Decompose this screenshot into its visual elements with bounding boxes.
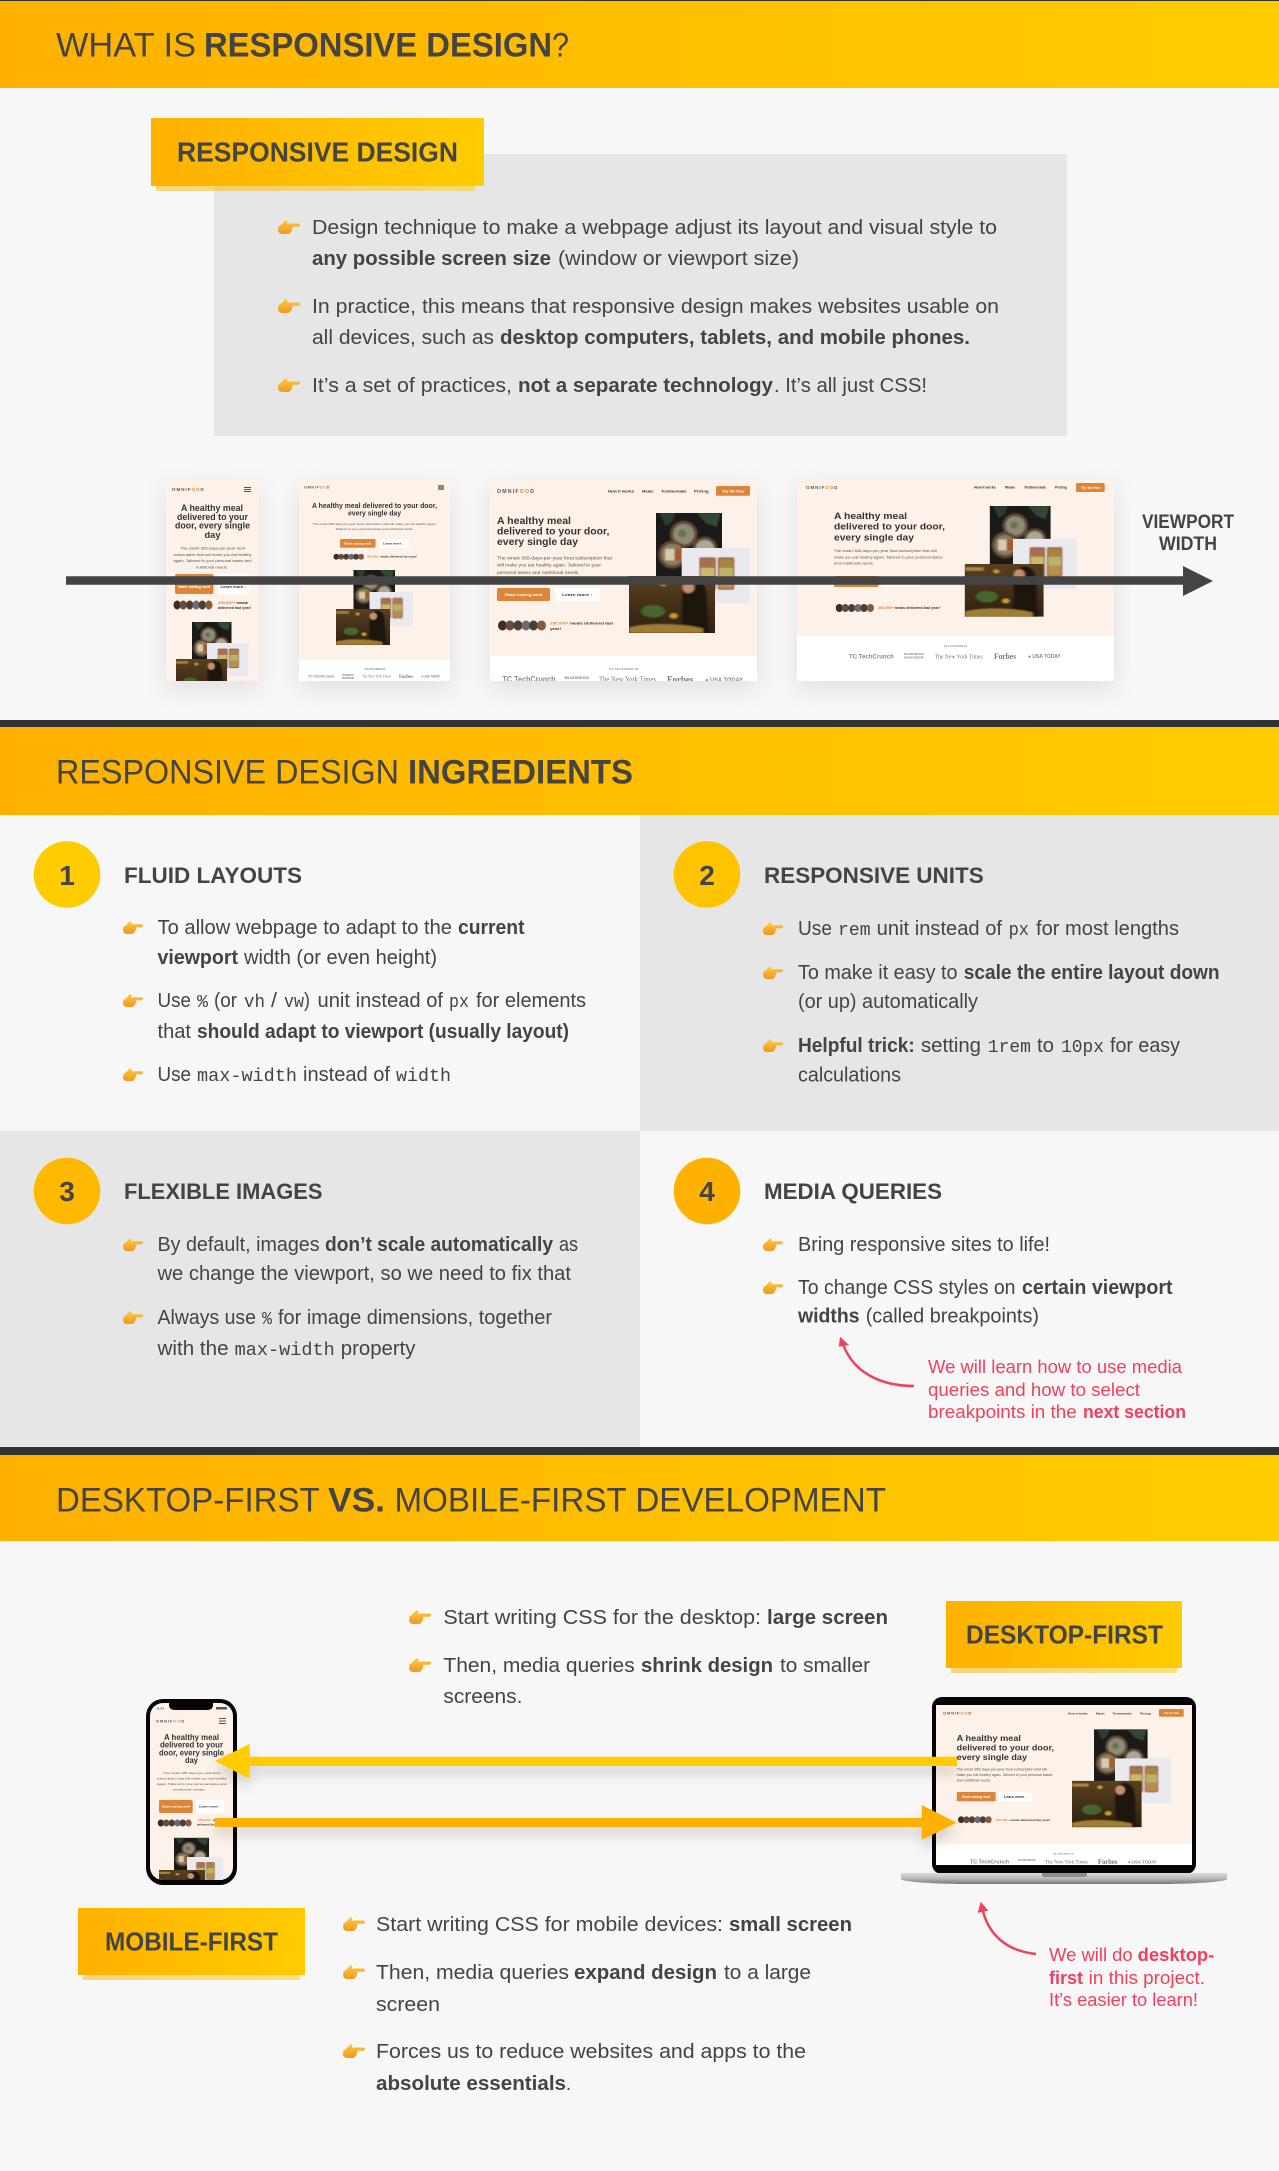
- device: laptop: Forbes: [1098, 1859, 1118, 1866]
- screen: tablet width: delivered to your door,: [497, 525, 609, 537]
- device: laptop: 250,000+ meals delivered last year!: [996, 1818, 1050, 1822]
- device: phone: Learn more ↓: [199, 1805, 222, 1809]
- heading banner: desktop-first vs mobile-first: MOBILE-FIRST DEVELOPMENT: [394, 1482, 886, 1520]
- heading banner: desktop-first vs mobile-first: VS.: [328, 1482, 385, 1520]
- device: phone: 9:41: [157, 1706, 164, 1710]
- badge: responsive design: RESPONSIVE DESIGN: [177, 136, 458, 168]
- screen: small tablet width: Start eating well: [344, 542, 371, 546]
- arrow: desktop-first shrink to mobile: [215, 1744, 957, 1779]
- screen: desktop width: A healthy meal: [834, 511, 907, 522]
- arrow: red curved to laptop: [978, 1902, 1036, 1954]
- bullet: helpful trick: setting: [921, 1035, 981, 1057]
- screen: phone width: delivered last year!: [218, 606, 251, 610]
- bullet: change css styles: certain viewport: [1022, 1277, 1173, 1299]
- device: laptop: The smart 365-days-per-year food subscription that will: [957, 1768, 1047, 1772]
- bullet: absolute essentials: Forces us to reduce websites and apps to the: [376, 2041, 806, 2063]
- bullet: change css styles: To change CSS styles on: [798, 1277, 1016, 1299]
- bullet: start with desktop: large screen: [767, 1607, 888, 1629]
- screen: small tablet width: OMNIFOOD: [304, 486, 330, 490]
- bullet: change css styles: [763, 1277, 1173, 1328]
- screen: phone width: 250,000+ meals: [218, 601, 248, 605]
- panel: definition bullets: [151, 118, 1067, 436]
- screen: desktop width: OMNIFOOD: [806, 485, 838, 490]
- bullet: set of practices: [278, 375, 927, 397]
- label: viewport width: VIEWPORT: [1142, 512, 1234, 533]
- screen: desktop width: Try for free: [1081, 486, 1100, 490]
- screen: tablet width: TC TechCrunch: [502, 675, 556, 684]
- callout: desktop-first in this project: desktop-: [1138, 1945, 1214, 1965]
- bullet: percent for images: property: [341, 1338, 415, 1360]
- bullet: percent units: ): [304, 990, 310, 1012]
- bullet: adapt to viewport: viewport: [158, 947, 238, 969]
- bullet: shrink design: shrink design: [641, 1655, 773, 1677]
- device: phone: day: [185, 1756, 199, 1765]
- screen: small tablet width: Forbes: [399, 675, 413, 680]
- bullet: in practice: all devices, such as: [312, 327, 494, 349]
- screen: tablet width: year!: [550, 626, 561, 631]
- screen: tablet width: Learn more ↓: [562, 592, 593, 597]
- device: phone: Start eating well: [162, 1805, 190, 1809]
- bullet: rem unit: px: [1009, 920, 1029, 941]
- screen: tablet width: Start eating well: [504, 592, 542, 597]
- bullet: max-width: width: [396, 1066, 451, 1087]
- screen: phone width: delivered to your: [177, 512, 248, 523]
- heading banner: what is responsive design: [0, 0, 1279, 88]
- screen: tablet width: [490, 480, 757, 684]
- bullet: max-width: max-width: [197, 1066, 297, 1087]
- screen: tablet width: How it works: [608, 488, 635, 494]
- bullet: rem unit: [763, 918, 1179, 941]
- screen: desktop width: make you eat healthy again. Tailored to your personal tastes: [834, 556, 943, 560]
- label: viewport width: WIDTH: [1159, 534, 1217, 555]
- screen: small tablet width: ● USA TODAY: [421, 674, 441, 678]
- arrow: viewport width: [66, 566, 1213, 596]
- device: laptop: [901, 1697, 1227, 1884]
- callout: desktop-first in this project: It’s easier to learn!: [1049, 1990, 1198, 2010]
- bullet: absolute essentials: absolute essentials: [376, 2073, 566, 2095]
- bullet: adapt to viewport: width (or even height): [243, 947, 437, 969]
- bullet: percent units: [123, 990, 586, 1043]
- bullet: rem unit: Use: [798, 918, 832, 940]
- device: laptop: Testimonials: [1113, 1711, 1132, 1715]
- device: laptop: ● USA TODAY: [1128, 1860, 1157, 1864]
- bullet: scale layout: scale the entire layout down: [964, 962, 1220, 984]
- heading banner: ingredients: INGREDIENTS: [408, 754, 633, 792]
- device: phone: A healthy meal: [164, 1733, 219, 1742]
- label: viewport width: [1142, 512, 1234, 555]
- screen: small tablet width: A healthy meal delivered to your door,: [312, 503, 437, 510]
- callout: desktop-first in this project: [1049, 1945, 1214, 2010]
- device: laptop: Try for free: [1164, 1711, 1179, 1715]
- bullet: helpful trick: for easy: [1110, 1035, 1180, 1057]
- bullet: start with mobile: small screen: [729, 1914, 852, 1936]
- screen: phone width: OMNIFOOD: [172, 487, 205, 492]
- bullet: percent for images: for image dimensions, together: [278, 1307, 552, 1329]
- device: laptop: A healthy meal: [957, 1733, 1021, 1743]
- arrow: mobile-first expand to desktop: [215, 1805, 957, 1840]
- device: laptop: BUSINESS: [1018, 1858, 1036, 1862]
- screen: tablet width: will make you eat healthy again. Tailored to your: [497, 562, 602, 568]
- screen: tablet width: A healthy meal: [497, 515, 571, 527]
- bullet: adapt to viewport: [123, 917, 525, 969]
- bullet: helpful trick: 10px: [1061, 1037, 1104, 1058]
- device: laptop: Meals: [1096, 1711, 1105, 1715]
- device: phone: subscription that will make you eat healthy: [157, 1776, 227, 1780]
- panel: media queries: [640, 1131, 1279, 1447]
- screen: tablet width: 250,000+ meals delivered last: [550, 620, 614, 626]
- screen: phone width: Learn more ↓: [220, 585, 247, 589]
- bullet: helpful trick: calculations: [798, 1064, 901, 1086]
- badge: desktop-first: DESKTOP-FIRST: [966, 1620, 1163, 1650]
- screen: small tablet width: [299, 480, 450, 681]
- device: phone: The smart 365-days-per-year food: [163, 1771, 221, 1775]
- bullet: percent units: that: [158, 1021, 191, 1043]
- screen: tablet width: personal tastes and nutritional needs.: [497, 570, 580, 575]
- screen: small tablet width: Learn more ↓: [383, 542, 405, 546]
- heading: fluid layouts: FLUID LAYOUTS: [124, 863, 302, 888]
- screen: desktop width: Pricing: [1055, 486, 1067, 490]
- device: laptop: OMNIFOOD: [943, 1710, 972, 1716]
- screen: desktop width: Forbes: [994, 652, 1016, 661]
- number badge 3: [34, 1158, 100, 1224]
- device: laptop: Pricing: [1140, 1711, 1151, 1715]
- screen: desktop width: Meals: [1005, 486, 1015, 490]
- screen: tablet width: The smart 365-days-per-year food subscription that: [497, 556, 613, 560]
- screen: desktop width: TC TechCrunch: [849, 654, 894, 660]
- callout: desktop-first in this project: We will do: [1049, 1945, 1133, 1965]
- screen: small tablet width: Tailored to your personal tastes and nutritional needs.: [336, 527, 414, 531]
- bullet: start with mobile: [343, 1914, 852, 1936]
- number badge 2: [674, 841, 740, 908]
- device: phone: 250,000+ meals: [198, 1818, 222, 1822]
- screen: desktop width: ● USA TODAY: [1028, 654, 1061, 660]
- bullet: max-width: Use: [158, 1064, 191, 1086]
- bullet: rem unit: unit instead of: [877, 918, 1002, 940]
- screen: desktop width: Testimonials: [1024, 486, 1046, 490]
- screen: phone width: subscription that will make you eat healthy: [174, 553, 252, 557]
- screen: desktop width: INSIDER: [904, 656, 924, 660]
- screen: phone width: A healthy meal: [181, 503, 243, 514]
- panel: flexible images: [0, 1131, 640, 1447]
- bullet: set of practices: . It’s all just CSS!: [774, 375, 927, 397]
- number badge 2: 2: [699, 860, 715, 891]
- screen: tablet width: Meals: [642, 488, 654, 494]
- bullet: images don't scale: [123, 1234, 578, 1285]
- arrow: red curved to breakpoints: [839, 1337, 914, 1386]
- bullet: percent units: should adapt to viewport (usually layout): [197, 1021, 569, 1043]
- screen: small tablet width: The New York Times: [362, 674, 391, 678]
- bullet: helpful trick: [763, 1035, 1180, 1086]
- device: laptop: The New York Times: [1045, 1860, 1088, 1866]
- bullet: expand design: Then, media queries: [376, 1962, 569, 1984]
- bullet: bring to life: Bring responsive sites to life!: [798, 1234, 1050, 1256]
- bullet: expand design: [343, 1962, 811, 2016]
- bullet: percent units: Use: [158, 990, 191, 1012]
- screen: desktop width: AS FEATURED IN: [944, 645, 967, 648]
- bullet: helpful trick: Helpful trick:: [798, 1035, 915, 1057]
- bullet: expand design: expand design: [574, 1962, 717, 1984]
- bullet: set of practices: not a separate technology: [518, 375, 774, 397]
- callout: desktop-first in this project: first: [1049, 1968, 1083, 1988]
- bullet: start with mobile: Start writing CSS for mobile devices:: [376, 1914, 723, 1936]
- bullet: shrink design: Then, media queries: [443, 1655, 635, 1677]
- heading: flexible images: FLEXIBLE IMAGES: [124, 1179, 322, 1204]
- screen: tablet width: Try for free: [722, 489, 744, 493]
- screen: tablet width: The New York Times: [599, 675, 656, 684]
- screen: desktop width: How it works: [974, 486, 996, 490]
- bullet: shrink design: screens.: [443, 1686, 522, 1708]
- bullet: start with desktop: Start writing CSS for the desktop:: [443, 1607, 761, 1629]
- badge: mobile-first: [78, 1908, 305, 1980]
- bullet: expand design: screen: [376, 1994, 440, 2016]
- section: desktop-first vs mobile-first: [0, 1447, 1279, 2095]
- screen: small tablet width: 250,000+ meals delivered last year!: [367, 555, 417, 559]
- number badge 1: [34, 841, 100, 908]
- badge: responsive design: [151, 118, 484, 191]
- bullet: percent for images: Always use: [158, 1307, 256, 1329]
- panel: fluid layouts: [0, 815, 640, 1131]
- screen: phone width: door, every single: [175, 520, 250, 532]
- badge: desktop-first: [946, 1601, 1182, 1673]
- screen: phone width: Start eating well: [178, 585, 210, 589]
- callout: next section note: breakpoints in the: [928, 1402, 1077, 1422]
- screen: desktop width: [797, 479, 1114, 681]
- bullet: percent for images: max-width: [235, 1340, 335, 1361]
- device: phone: delivered to your: [160, 1741, 223, 1750]
- heading banner: desktop-first vs mobile-first: [0, 1447, 1279, 1541]
- screen: tablet width: Forbes: [667, 674, 694, 684]
- heading: responsive units: RESPONSIVE UNITS: [764, 863, 984, 888]
- callout: next section note: We will learn how to use media: [928, 1357, 1183, 1377]
- desktop-first bullets: [409, 1607, 888, 1708]
- device: laptop: Start eating well: [962, 1795, 990, 1799]
- screen: tablet width: AS FEATURED IN: [609, 667, 638, 671]
- mobile-first bullets: [343, 1914, 852, 2095]
- bullet: design technique: (window or viewport size): [558, 248, 799, 270]
- screen: small tablet width: AS FEATURED IN: [364, 668, 385, 671]
- bullet: start with desktop: [409, 1607, 888, 1629]
- screen: tablet width: BUSINESS: [564, 676, 590, 680]
- bullet: shrink design: to smaller: [780, 1655, 870, 1677]
- screen: phone width: The smart 365-days-per-year food: [180, 546, 245, 550]
- bullet: change css styles: widths: [797, 1306, 860, 1328]
- device: phone: OMNIFOOD: [156, 1718, 185, 1724]
- bullet: rem unit: rem: [838, 920, 871, 941]
- heading: media queries: MEDIA QUERIES: [764, 1179, 942, 1204]
- device: phone: [146, 1699, 237, 1900]
- bullet: in practice: In practice, this means that responsive design makes websites usable on: [312, 296, 999, 318]
- bullet: percent for images: with the: [156, 1338, 229, 1360]
- bullet: change css styles: (called breakpoints): [866, 1306, 1039, 1328]
- bullet: percent units: (or: [214, 990, 237, 1012]
- bullet: set of practices: It’s a set of practices,: [312, 375, 512, 397]
- screen: desktop width: 250,000+ meals delivered last year!: [878, 606, 940, 610]
- device: laptop: delivered to your door,: [957, 1742, 1054, 1752]
- bullet: helpful trick: to: [1037, 1035, 1054, 1057]
- bullet: scale layout: (or up) automatically: [798, 991, 978, 1013]
- screen: phone width: again. Tailored to your personal tastes and: [174, 559, 252, 563]
- bullet: max-width: [123, 1064, 451, 1087]
- device: phone: delivered last year!: [197, 1822, 224, 1826]
- bullet: design technique: [278, 217, 997, 270]
- bullet: absolute essentials: .: [566, 2073, 571, 2095]
- screen: phone width: day: [204, 530, 221, 541]
- number badge 1: 1: [59, 860, 75, 891]
- bullet: percent units: /: [271, 990, 277, 1012]
- device: laptop: every single day: [957, 1752, 1027, 1762]
- viewport screens row: [66, 479, 1234, 695]
- screen: phone width: nutritional needs.: [196, 566, 228, 570]
- screen: tablet width: every single day: [497, 536, 578, 548]
- heading banner: desktop-first vs mobile-first: DESKTOP-FIRST: [56, 1482, 320, 1520]
- device: laptop: How it works: [1068, 1711, 1088, 1715]
- screen: small tablet width: INSIDER: [342, 677, 354, 680]
- device: laptop: AS FEATURED IN: [1053, 1852, 1074, 1856]
- bullet: in practice: [278, 296, 999, 349]
- bullet: percent units: for elements: [476, 990, 586, 1012]
- bullet: percent units: px: [449, 992, 469, 1013]
- screen: small tablet width: The smart 365-days-per-year food subscription that will make you eat healthy again.: [313, 522, 437, 526]
- callout: desktop-first in this project: in this project.: [1089, 1968, 1205, 1988]
- number badge 3: 3: [59, 1176, 75, 1207]
- heading banner: what is responsive design: RESPONSIVE DESIGN: [204, 26, 552, 64]
- bullet: percent units: vh: [244, 992, 265, 1013]
- bullet: max-width: instead of: [303, 1064, 390, 1086]
- screen: small tablet width: every single day: [348, 511, 401, 518]
- device: laptop: TC TechCrunch: [970, 1860, 1010, 1866]
- heading banner: ingredients: [0, 720, 1279, 815]
- callout: next section note: queries and how to select: [928, 1380, 1140, 1400]
- bullet: shrink design: [409, 1655, 870, 1708]
- bullet: scale layout: To make it easy to: [798, 962, 958, 984]
- heading banner: what is responsive design: WHAT IS: [56, 26, 196, 64]
- device: laptop: Learn more ↓: [1004, 1795, 1027, 1799]
- callout: next section note: next section: [1083, 1402, 1186, 1422]
- bullet: scale layout: [763, 962, 1220, 1013]
- bullet: helpful trick: 1rem: [988, 1037, 1031, 1058]
- badge: mobile-first: MOBILE-FIRST: [105, 1926, 278, 1956]
- number badge 4: [674, 1158, 740, 1224]
- screen: desktop width: BUSINESS: [904, 652, 924, 656]
- section: responsive design ingredients: [0, 720, 1279, 1447]
- bullet: images don't scale: we change the viewport, so we need to fix that: [156, 1263, 571, 1285]
- screen: tablet width: OMNIFOOD: [497, 489, 535, 495]
- bullet: design technique: any possible screen size: [312, 248, 551, 270]
- bullet: design technique: Design technique to make a webpage adjust its layout and visual style to: [312, 217, 997, 239]
- screen: tablet width: Pricing: [694, 488, 709, 494]
- bullet: percent for images: [123, 1307, 552, 1361]
- device: phone: again. Tailored to your personal tastes and: [157, 1782, 227, 1786]
- screen: desktop width: The New York Times: [935, 654, 983, 660]
- number badge 4: 4: [699, 1176, 715, 1207]
- device: phone: door, every single: [159, 1749, 225, 1758]
- bullet: adapt to viewport: current: [458, 917, 525, 939]
- section: what is responsive design: [0, 0, 1279, 695]
- bullet: percent for images: %: [262, 1309, 273, 1330]
- screen: tablet width: ● USA TODAY: [705, 678, 743, 684]
- screen: small tablet width: BUSINESS: [342, 674, 354, 677]
- screen: desktop width: delivered to your door,: [834, 522, 945, 533]
- heading banner: ingredients: RESPONSIVE DESIGN: [56, 754, 399, 792]
- bullet: percent units: unit instead of: [318, 990, 443, 1012]
- device: phone: nutritional needs.: [173, 1788, 206, 1792]
- screen: small tablet width: TC TechCrunch: [308, 674, 334, 678]
- bullet: expand design: to a large: [724, 1962, 811, 1984]
- screen: phone width: [166, 480, 259, 695]
- screen: desktop width: and nutritional needs.: [834, 562, 874, 566]
- bullet: images don't scale: don’t scale automatically: [325, 1234, 554, 1256]
- callout: next section note: [928, 1357, 1186, 1422]
- bullet: percent units: %: [197, 992, 209, 1013]
- screen: tablet width: Testimonials: [661, 488, 687, 494]
- bullet: images don't scale: as: [559, 1234, 578, 1256]
- device: laptop: make you eat healthy again. Tailored to your personal tastes: [957, 1773, 1053, 1777]
- device: laptop: and nutritional needs.: [957, 1778, 991, 1782]
- bullet: rem unit: for most lengths: [1036, 918, 1179, 940]
- bullet: percent units: vw: [284, 992, 304, 1013]
- bullet: in practice: desktop computers, tablets, and mobile phones.: [500, 327, 970, 349]
- bullet: absolute essentials: [343, 2041, 806, 2095]
- screen: desktop width: every single day: [834, 532, 915, 543]
- bullet: images don't scale: By default, images: [158, 1234, 320, 1256]
- panel: responsive units: [640, 815, 1279, 1131]
- heading banner: what is responsive design: ?: [552, 26, 569, 64]
- screen: desktop width: The smart 365-days-per-year food subscription that will: [834, 549, 937, 553]
- bullet: adapt to viewport: To allow webpage to adapt to the: [158, 917, 452, 939]
